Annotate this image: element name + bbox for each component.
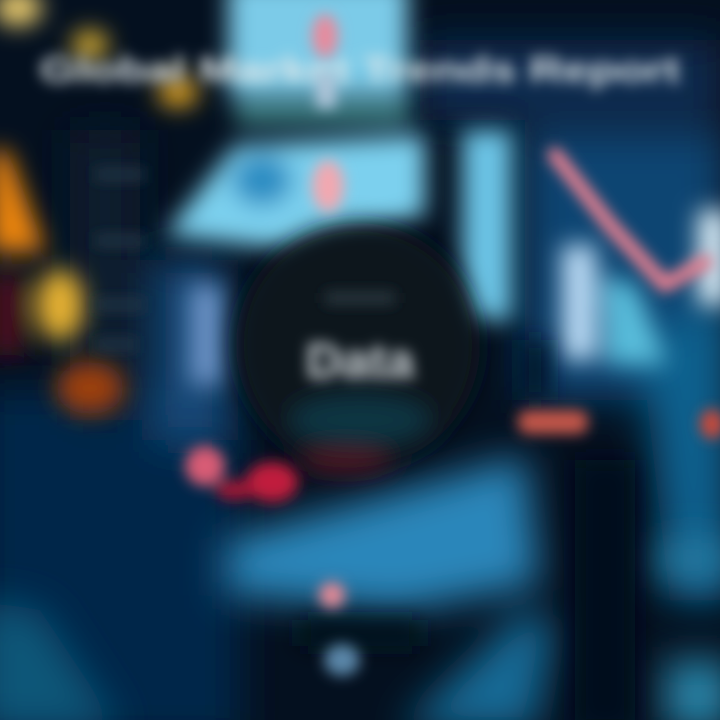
panel: upper light blue column [165, 0, 425, 250]
list: left side labels [95, 170, 145, 349]
chart: pink trend line [555, 155, 705, 285]
accent: pink blobs [185, 14, 720, 676]
panel: dark lower strips [300, 340, 635, 720]
panel: lower blue area [0, 455, 720, 720]
panel: warm lights on the left [0, 0, 198, 414]
title: Global Market Trends Report [40, 49, 680, 90]
panel: central dark circle [236, 223, 480, 474]
panel: right light blue columns [190, 130, 720, 385]
central value text: Data [306, 333, 415, 389]
central value text [306, 292, 415, 389]
